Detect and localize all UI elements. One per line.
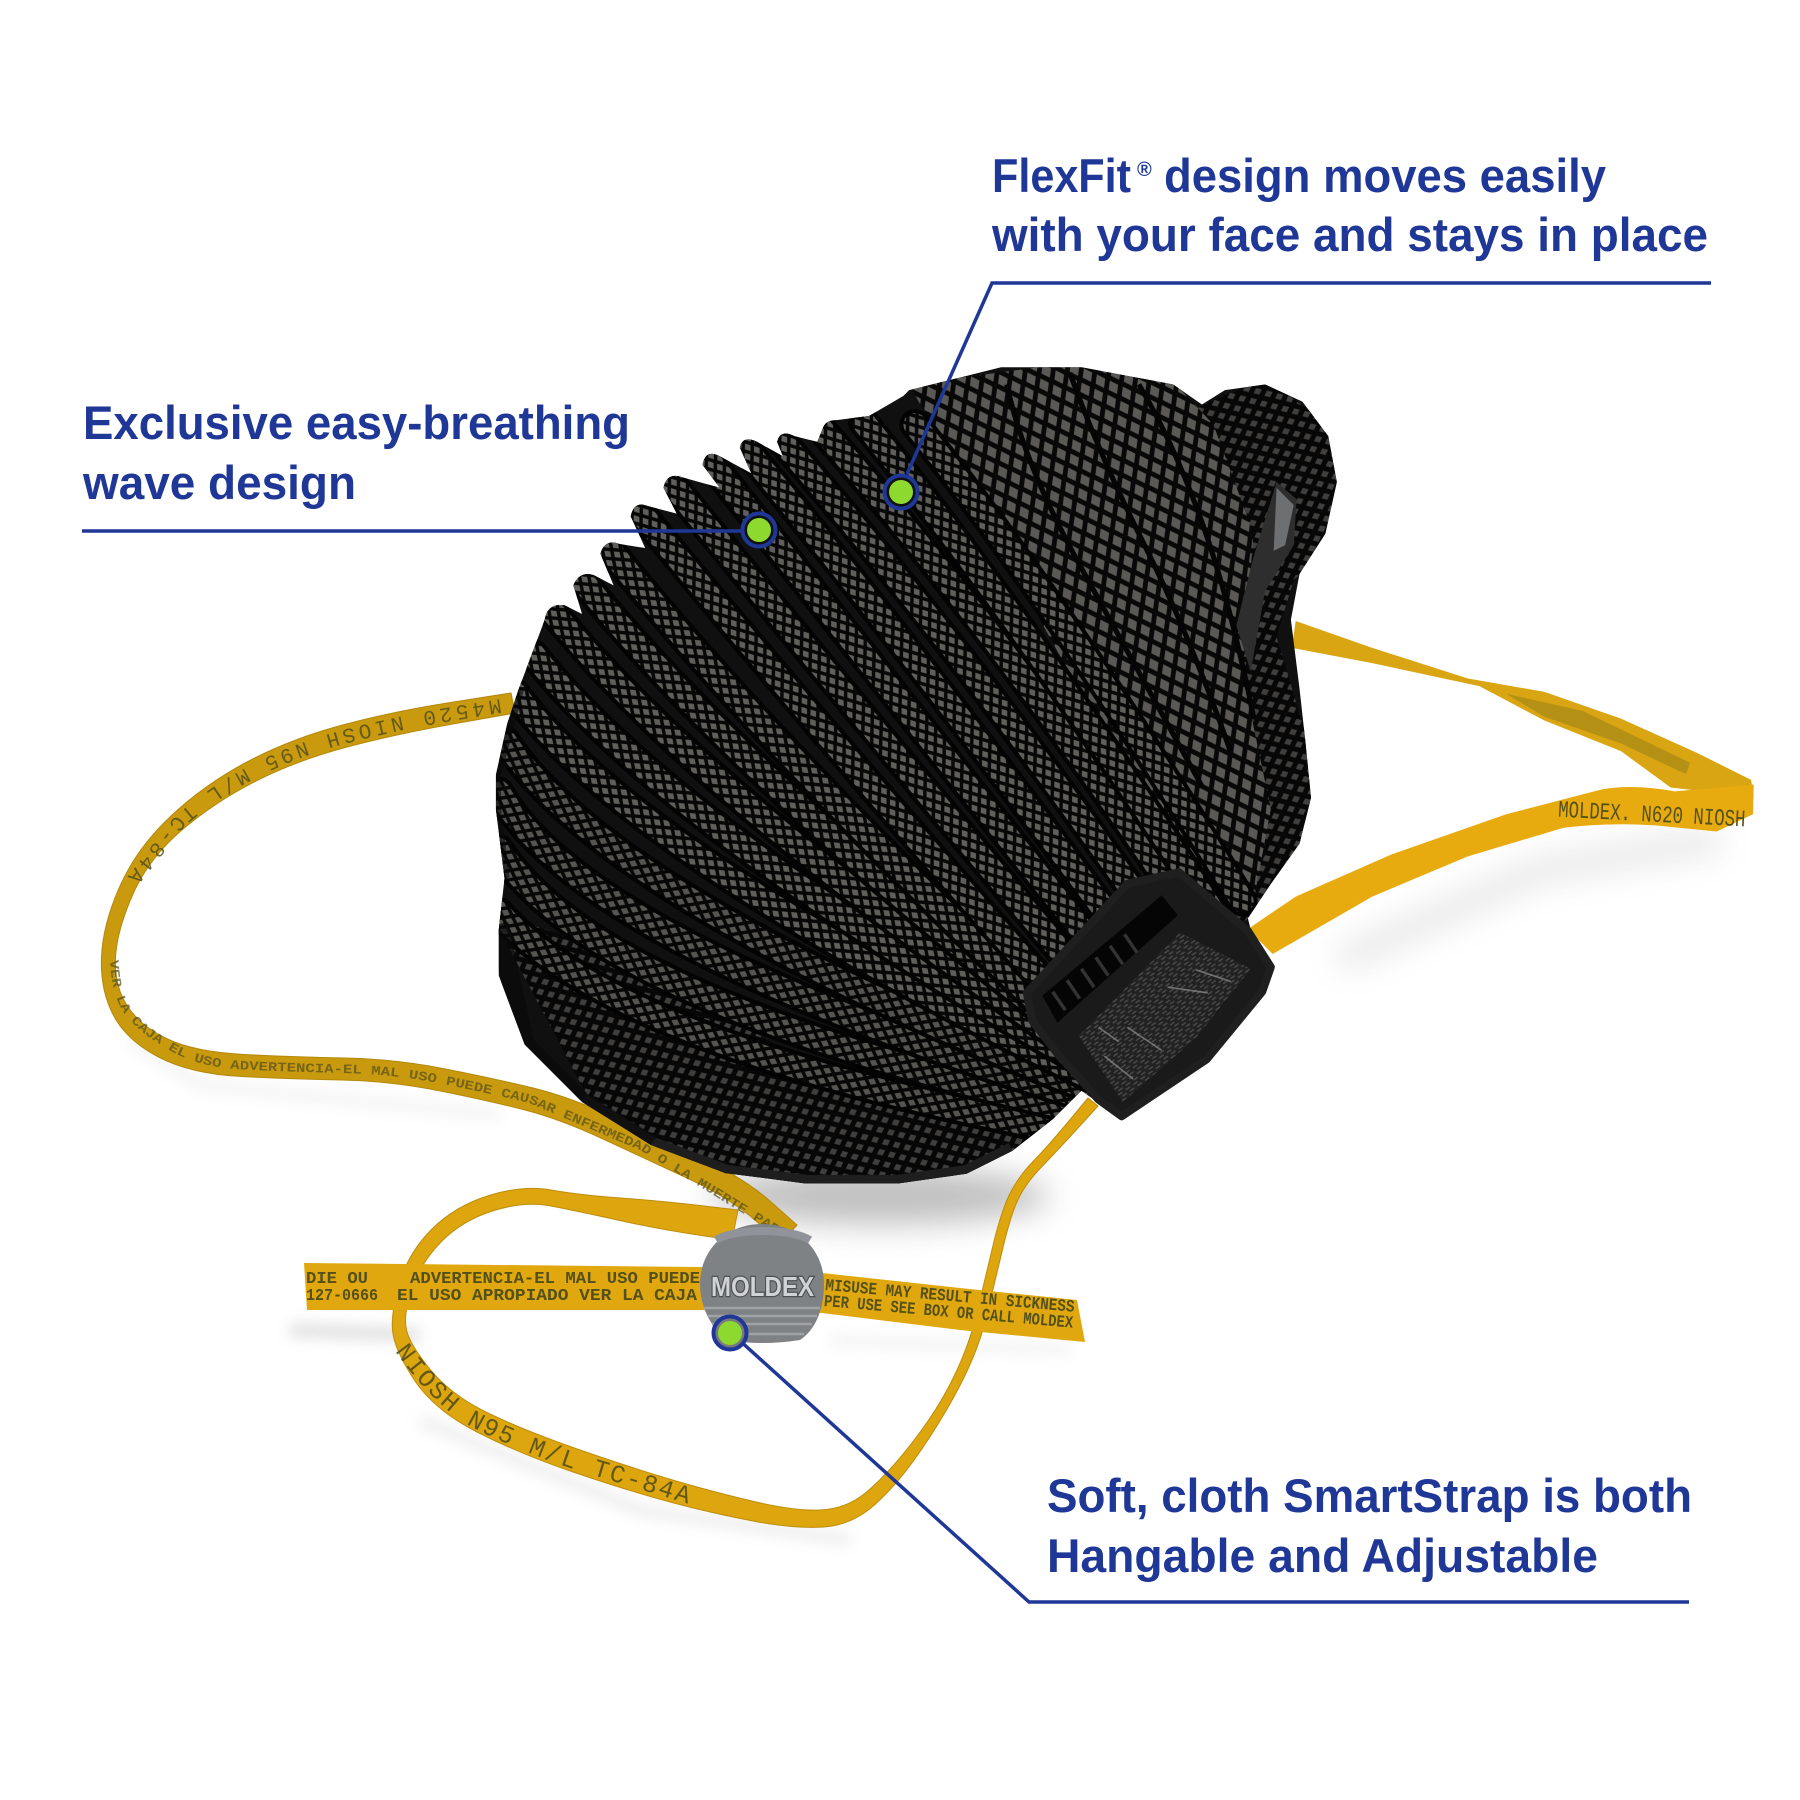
heading: FlexFit line 1: FlexFit [992, 149, 1131, 202]
soft shadows [130, 840, 1720, 1540]
glossy flange highlight [1236, 482, 1297, 671]
rim darkening [499, 924, 651, 1145]
leader line [907, 283, 1711, 474]
heading: FlexFit line 2: with your face and stays in place [991, 208, 1708, 261]
strap: left ear loop [100, 692, 798, 1230]
strap print: upper loop [1506, 694, 1690, 774]
exhalation tab buckle [1027, 872, 1271, 1116]
strap print: left: EL USO APROPIADO VER LA CAJA [397, 1287, 698, 1306]
heading: FlexFit line 1: design moves easily [1164, 149, 1606, 202]
buckle teeth [1053, 934, 1137, 1010]
heading: SmartStrap: Soft, cloth SmartStrap is both [1047, 1469, 1692, 1522]
callout: wave design [82, 396, 776, 546]
mask respirator [490, 361, 1345, 1194]
brim edge [582, 1102, 1013, 1183]
strap print: advertencia line [110, 960, 780, 1236]
lower brim [490, 913, 1087, 1194]
strap print: left: DIE OU [306, 1270, 368, 1289]
strap print: right [823, 1277, 1076, 1334]
heading: SmartStrap [1047, 1469, 1692, 1582]
marker dot [742, 514, 776, 546]
button logo: MOLDEX [711, 1271, 814, 1302]
infographic canvas [82, 158, 1754, 1604]
upper-right large scale panel [909, 361, 1271, 901]
strap print: right: PER USE SEE BOX OR CALL MOLDEX [823, 1293, 1074, 1334]
strap print: left: 127-0666 [306, 1287, 378, 1306]
strap print: right: MISUSE MAY RESULT IN SICKNESS [824, 1277, 1075, 1318]
button grooves [704, 1308, 820, 1334]
buckle slot [1042, 895, 1178, 1023]
pleated wave ribs [499, 422, 1242, 1136]
strap print: NIOSH N95 (upside down) [125, 697, 512, 880]
heading: FlexFit line 1: ® [1137, 159, 1152, 181]
strap: horizontal tail through buckle [304, 1263, 1085, 1342]
heading: SmartStrap: Hangable and Adjustable [1047, 1529, 1598, 1582]
strap print: left [306, 1270, 700, 1306]
marker dot [714, 1316, 746, 1350]
leader line [82, 529, 742, 533]
strap: left ear loop: VER LA CAJA EL USO ADVERTENCIA-EL MAL USO PUEDE CAUSAR ENFERMEDAD O LA MUERTE PARA [110, 960, 779, 1226]
adjuster button [700, 1224, 824, 1343]
heading: wave design: Exclusive easy-breathing [83, 396, 630, 449]
callout: SmartStrap [714, 1316, 1692, 1602]
strap: right ear loop [1248, 621, 1754, 954]
buckle highlights [1099, 970, 1231, 1079]
lobe grooves [1007, 373, 1254, 786]
strap: lower adjustable loop [392, 1097, 1099, 1528]
strap print: NIOSH N95 M/L [395, 1351, 712, 1511]
strap: lower adjustable loop: NIOSH N95 M/L TC-84A [396, 1342, 688, 1504]
heading: wave design [82, 396, 630, 509]
leader line [738, 1339, 1689, 1602]
marker dot [884, 476, 918, 508]
strap print: left: ADVERTENCIA-EL MAL USO PUEDE [410, 1270, 700, 1289]
callout: FlexFit [884, 149, 1711, 508]
ear flange [1198, 384, 1337, 922]
mask body silhouette [496, 367, 1337, 1183]
heading: wave design: wave design [82, 456, 356, 509]
